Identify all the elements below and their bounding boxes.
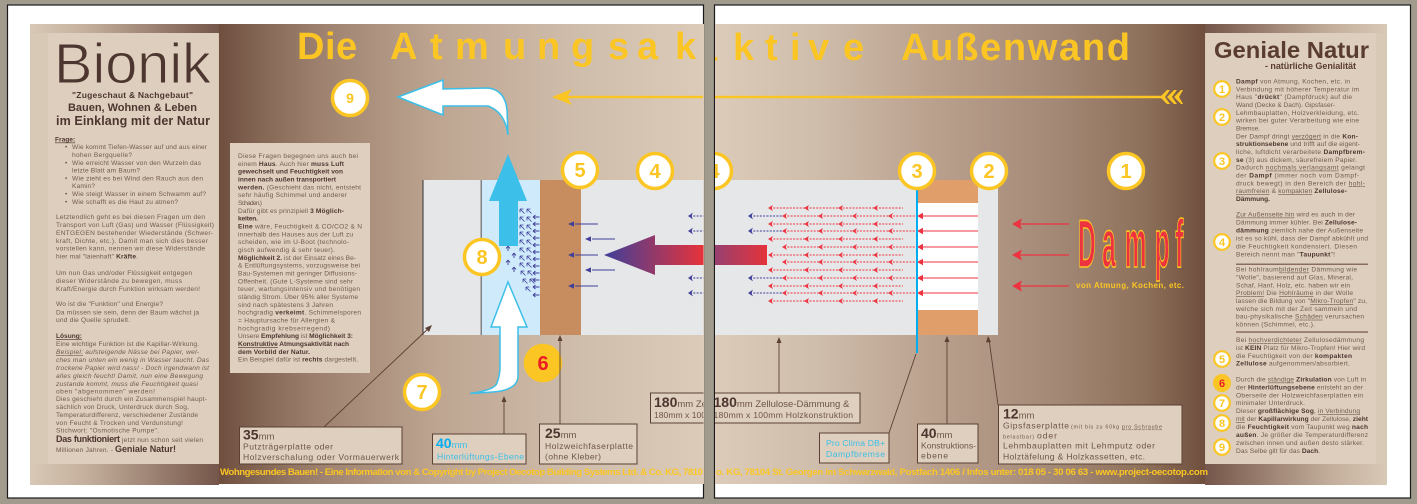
panel: question text box: innerhalb des Hauses aus der Luft zu xyxy=(238,231,353,238)
arrows: incoming vapour xyxy=(1012,218,1069,292)
title: Die Atmungsaktive Außenwand: Außenwand xyxy=(901,27,1130,69)
panel: question text box: Diese Fragen begegnen uns auch bei xyxy=(238,153,359,160)
text: Lösung: alles gleich feucht! Damit, nun eine Bewegung xyxy=(56,373,203,380)
text: Frage: Wie kommt Tiefen-Wasser auf und aus einer xyxy=(72,144,208,151)
number badges in sidebar: 4 xyxy=(1219,237,1226,249)
number badges in sidebar: 1 xyxy=(1219,84,1225,96)
panel: central brown background xyxy=(219,24,1205,484)
text: explanation steps: Bei hohlraumbildender Dämmung wie xyxy=(1236,266,1357,274)
text: Lösung: Temperaturdifferenz, verschiedener Zustände xyxy=(56,412,198,419)
text: Lösung: Geniale Natur! xyxy=(115,444,176,454)
label: Pro Clima DB+: Dampfbremse xyxy=(826,449,885,459)
panel: question text box: werden. (Geschieht das nicht, entsteht xyxy=(237,184,361,191)
text: Lösung: sächlich von Druck, Unterdruck durch Sog, xyxy=(56,404,189,411)
label: Pro Clima DB+: Pro Clima DB+ xyxy=(826,438,885,448)
panel: question text box: Ein Beispiel dafür ist rechts dargestellt. xyxy=(238,357,358,364)
panel: question text box: = Hauptursache für Allergien & xyxy=(238,318,336,324)
label: 35mm: Holzverschalung oder Vormauerwerk xyxy=(243,452,400,462)
heading: Geniale Natur: Geniale Natur xyxy=(1214,37,1369,63)
label: 12mm xyxy=(998,405,1182,464)
text: explanation steps: bau-physikalische Schäden verursachen xyxy=(1236,314,1364,321)
text: Frage: vorstellen kann, nennen wir diese Widerstände xyxy=(56,246,205,252)
label: Dampf: von Atmung, Kochen, etc. xyxy=(1076,281,1184,290)
badge 6: 6 xyxy=(537,353,549,375)
panel: question text box: hochgradig krebserregend) xyxy=(238,325,330,332)
label: 40mm Hinterlüftungs-Ebene: 40mm xyxy=(436,435,467,451)
subheading xyxy=(56,90,210,128)
badge 9 xyxy=(332,80,368,116)
text: Frage: Da müssen sie sein, denn der Baum wächst ja xyxy=(56,310,199,316)
text: explanation steps: Bereich nennt man "Taupunkt"! xyxy=(1236,252,1335,258)
label: 180mm Zellulose xyxy=(680,393,860,423)
text: explanation steps: Lehmbauplatten, Holzverkleidung, etc. xyxy=(1236,110,1359,117)
text: explanation steps: Durch die ständige Zirkulation von Luft in xyxy=(1236,376,1366,384)
label: 12mm: Holztäfelung & Holzkassetten, etc. xyxy=(1003,452,1145,462)
text: explanation steps: Dadurch nochmals verlangsamt gelangt xyxy=(1236,165,1365,172)
title: Die Atmungsaktive Außenwand: Atmungsak xyxy=(390,26,697,68)
text: explanation steps: Problem! Die Hohlräume in der Wolle xyxy=(1236,290,1353,297)
text: Lösung: Millionen Jahren. - xyxy=(56,447,113,454)
badge 3: 3 xyxy=(911,161,923,183)
panel: question text box: ständig Strom. Über 95% aller Systeme xyxy=(238,293,358,301)
text: Lösung: oben "abgenommen" werden! xyxy=(56,388,155,396)
label: 12mm: oder xyxy=(1037,430,1057,440)
label: 25mm: Holzweichfaserplatte xyxy=(545,441,633,451)
text: Frage: letzte Blatt am Baum? xyxy=(72,168,140,174)
arrow: white air outflow xyxy=(398,80,508,135)
panel: question text box: dem Vorbild der Natur. xyxy=(238,349,310,356)
number badges in sidebar: 3 xyxy=(1219,156,1225,168)
footer: copyright line: o. KG, 78104 St. Georgen im Schwarzwald, Postfach 1406 / Infos unter: 018 05 - 30 06 63 - www.project-oecotop.com xyxy=(716,467,1208,478)
badge 4 clipped: 4 xyxy=(708,161,720,183)
leader: Pro Clima xyxy=(889,354,916,433)
text: explanation steps: minimaler Unterdruck. xyxy=(1236,400,1305,407)
text: Frage: Letztendlich geht es bei diesen Fragen um den xyxy=(56,214,205,221)
badge 4 clipped xyxy=(715,152,734,190)
text: explanation steps: Zur Außenseite hin wird es auch in der xyxy=(1236,212,1356,218)
text: explanation steps: ist es so kühl, dass der Dampf abkühlt und xyxy=(1236,236,1368,242)
arrows: dashed purple xyxy=(688,212,704,296)
badge 5: 5 xyxy=(574,160,586,182)
panel: Geniale Natur sidebar xyxy=(1205,24,1387,485)
text: Frage: Transport von Luft (Gas) und Wasser (Flüssigkeit) xyxy=(56,222,214,229)
wall diagram: left page xyxy=(240,80,734,464)
label: 180mm clipped part: 180mm x 100mm xyxy=(654,410,720,420)
badge 1 xyxy=(1108,154,1144,188)
text: explanation steps: dämmung ziemlich nahe der Außenseite xyxy=(1236,228,1363,234)
text: explanation steps: Oberseite der Holzweichfaserplatten ein xyxy=(1236,392,1363,399)
text: explanation steps: Dämmung immer kühler. Bei Zellulose- xyxy=(1236,220,1357,226)
badge 2: 2 xyxy=(983,161,995,183)
number badges in sidebar: 9 xyxy=(1219,442,1225,454)
number badges in sidebar: 6 xyxy=(1219,378,1225,390)
text: Lösung: von Feucht & Trocken und Verdunstung! xyxy=(56,420,183,427)
label: 35mm: Putzträgerplatte oder xyxy=(243,442,333,452)
text: Frage: • xyxy=(65,199,68,206)
panel: question text box: sind nach spätestens 3 Jahren xyxy=(238,302,333,309)
label: 12mm: 12mm xyxy=(1003,406,1034,422)
panel: question text box: gewechselt und Feuchtigkeit von xyxy=(238,169,343,176)
text: Lösung: zustande kommt, muss die Feuchtigkeit quasi xyxy=(55,381,199,388)
badge 6 xyxy=(524,344,562,382)
text: Lösung: Eine wichtige Funktion ist die Kapillar-Wirkung. xyxy=(56,341,199,348)
text: Frage: hohen Bergquelle? xyxy=(72,152,132,159)
arrows: solid red through construction layer xyxy=(917,213,978,296)
text: explanation steps: mit der Kapillarwirkung der Zellulose, zieht xyxy=(1236,416,1369,423)
text: explanation steps: zwischen innen und außen desto stärker. xyxy=(1236,440,1364,447)
label: 40mm Konstruktionsebene: 40mm xyxy=(921,425,952,441)
text: Frage: • xyxy=(65,176,68,182)
label: Dampf: Dampf xyxy=(1078,206,1184,282)
leader: 40mm ventilation xyxy=(502,396,506,434)
text: Lösung: Lösung: xyxy=(56,333,82,340)
panel: question text box: & Entlüftungsystems, vorzugsweise bei xyxy=(238,263,361,270)
text: explanation steps: lassen die Bildung von "Mikro-Tropfen" zu, xyxy=(1236,298,1367,305)
panel: question text box: Schaden.) xyxy=(238,200,262,207)
badge 9: 9 xyxy=(346,90,354,106)
text: Frage: • xyxy=(65,144,68,151)
text: Lösung: trockene Papier wird nass! - Doch irgendwann ist xyxy=(56,365,210,372)
text: Frage: Wie zieht es bei Wind den Rauch aus den xyxy=(72,176,203,182)
text: explanation steps: Verbindung mit höherer Temperatur im xyxy=(1236,86,1360,93)
text: Frage: Um nun Gas und/oder Flüssigkeit entgegen xyxy=(56,270,192,277)
label: 180mm Zellulose: 180mm Zellulose-Dämmung & xyxy=(714,394,850,410)
label: 180mm clipped part xyxy=(650,392,704,424)
text: Lösung: Dies geschieht durch ein Zusammenspiel haupt- xyxy=(56,396,207,403)
label: 25mm: (ohne Kleber) xyxy=(545,452,601,462)
text: explanation steps: die Feuchtigkeit von der kompakten xyxy=(1236,353,1352,360)
panel: question text box: Konstruktive Atmungsaktivität nach xyxy=(238,341,349,348)
panel: question text box: Eine wäre, Feuchtigkeit & CO/CO2 & N xyxy=(238,224,362,230)
footer: copyright line: Wohngesundes Bauen! - Eine Information von & Copyright by Project Oecotop Building Systems Ltd. & Co. KG, 7810 xyxy=(220,467,703,478)
text: explanation steps: außen. Je größer die Temperaturdifferenz xyxy=(1236,432,1368,439)
number badges in sidebar: 7 xyxy=(1219,398,1225,410)
badge 7 xyxy=(404,374,440,410)
panel: question text box: Offenheit. (Gute L-Systeme sind sehr xyxy=(238,278,354,285)
text: Frage: kraft, Dichte, etc.). Damit man sich dies besser xyxy=(56,238,209,245)
panel: question text box xyxy=(230,143,370,373)
text: explanation steps: "Wolle", basierend auf Glas, Mineral, xyxy=(1236,274,1353,281)
text: explanation steps: Bei hochverdichteter Zellulosedämmung xyxy=(1236,337,1364,344)
text: explanation steps: Dieser großflächige Sog, in Verbindung xyxy=(1236,408,1360,415)
text: Lösung: Das funktioniert xyxy=(56,434,120,444)
label: 40mm Konstruktionsebene: Konstruktions- xyxy=(921,440,976,450)
text: explanation steps: die Feuchtigkeit vom Taupunkt weg nach xyxy=(1236,424,1368,431)
arrow: blue air upward xyxy=(489,154,527,246)
label: 40mm Hinterlüftungs-Ebene xyxy=(432,434,526,464)
badge 8: 8 xyxy=(476,247,488,269)
arrow: big gradient vapour arrow xyxy=(604,235,704,275)
panel: Bionik sidebar xyxy=(30,24,219,485)
panel: question text box: Unsere Empfehlung ist Möglichkeit 3: xyxy=(238,333,353,340)
text: Frage: • xyxy=(65,160,68,167)
label: 12mm: Lehmbauplatten mit Lehmputz oder xyxy=(1003,440,1155,450)
text: Frage: dieser Widerstände zu bewegen, muss xyxy=(56,278,183,285)
arrows: blue moisture through fibre board xyxy=(568,221,615,289)
label: 180mm Zellulose: 180mm x 100mm Holzkonstruktion xyxy=(714,410,853,420)
text: explanation steps: druck bewegt) in den Bereich der hohl- xyxy=(1236,180,1365,187)
label: 35mm: 35mm xyxy=(243,426,274,442)
small arrows: moisture in ventilation layer xyxy=(506,209,540,297)
panel: question text box: hochgradig verkeimt. Schimmelsporen xyxy=(238,310,361,317)
leader: 35mm xyxy=(324,325,432,427)
vapour barrier line xyxy=(916,180,918,353)
title: Die Atmungsaktive Außenwand: a xyxy=(696,27,718,69)
subheading: "Zugeschaut & Nachgebaut" xyxy=(72,90,193,100)
label: 40mm Konstruktionsebene xyxy=(918,424,978,463)
heading: Bionik: Bionik xyxy=(54,32,212,96)
arrow: white air inflow xyxy=(470,282,527,394)
text: explanation steps: struktionsebene und trifft auf die eigent- xyxy=(1236,141,1360,148)
badge 5 xyxy=(562,152,598,188)
label: 25mm xyxy=(540,424,637,464)
text: Frage: und die Quelle sprudelt. xyxy=(56,317,130,324)
footer: copyright line xyxy=(220,467,1208,478)
text: explanation steps: se (3) aus dickem, säurefreiem Papier. xyxy=(1236,157,1357,164)
text: Frage: Kraft/Energie durch Funktion wirksam werden! xyxy=(56,286,200,293)
text: explanation steps: Zellulose aufgenommen/absorbiert. xyxy=(1236,360,1350,368)
arrows: dashed vapour rows xyxy=(748,205,917,304)
text: explanation steps: ist KEIN Platz für Mikro-Tropfen! Hier wird xyxy=(1236,345,1365,352)
text: Lösung: Beispiel: aufsteigende Nässe bei Papier, wel- xyxy=(56,349,200,356)
text: Frage: Wie schafft es die Haut zu atmen? xyxy=(72,199,178,206)
panel: question text box: innen nach außen transportiert xyxy=(238,176,337,184)
panel: question text box: Dafür gibt es prinzipiell 3 Möglich- xyxy=(238,208,344,215)
text: explanation steps: Wand (Decke & Dach). Gipsfaser- xyxy=(1236,102,1335,109)
text: Frage: Wie steigt Wasser in einem Schwamm auf? xyxy=(72,191,206,198)
panel: question text box: keiten. xyxy=(238,216,258,223)
label: 25mm: 25mm xyxy=(545,425,576,441)
panel: question text box: scheiden, wie im U-Boot (technolo- xyxy=(238,239,349,246)
text: explanation steps: Bremse. xyxy=(1236,126,1260,132)
text: explanation steps: die Feuchtigkeit kondensiert. Diesen xyxy=(1236,244,1357,250)
text: explanation steps: Dampf von Atmung, Kochen, etc. in xyxy=(1236,78,1350,86)
wall diagram: right page xyxy=(680,154,1184,464)
text: Lösung: ches man unten ein wenig in Wasser taucht. Das xyxy=(56,357,210,364)
text: Frage: Frage: xyxy=(55,136,75,144)
badge 2 xyxy=(972,154,1006,188)
text: Lösung: jetzt nun schon seit vielen xyxy=(121,437,203,444)
text: explanation steps: Der Dampf dringt verzögert in die Kon- xyxy=(1236,133,1358,140)
text: explanation steps: der Dampf (immer noch vom Dampf- xyxy=(1236,172,1359,180)
text: Frage: Wie erreicht Wasser von den Wurzeln das xyxy=(72,160,202,167)
number badges in sidebar xyxy=(1213,81,1231,455)
label: 12mm: (mit bis zu 60kg pro Schraube xyxy=(1071,424,1162,430)
number badges in sidebar: 5 xyxy=(1219,354,1225,366)
panel: question text box: teuer, wartungsintensiv und benötigen xyxy=(238,286,360,293)
text: Frage: ENTGEGEN bestehender Wiederstände (Schwer- xyxy=(56,230,213,237)
badge 4 xyxy=(638,154,672,188)
number badges in sidebar: 2 xyxy=(1219,112,1225,124)
text: explanation steps: Haus "drückt" (Dampfdruck) auf die xyxy=(1236,94,1352,101)
badge 8 xyxy=(464,240,500,274)
text: explanation steps: Schaf, Hanf, Holz, etc. haben wir ein xyxy=(1236,282,1350,289)
text: Frage: Wo ist die "Funktion" und Energie? xyxy=(56,301,163,308)
text: Frage xyxy=(55,136,214,324)
panel: question text box: gisch aufwendig & sehr teuer). xyxy=(238,247,335,254)
label: 40mm Konstruktionsebene: ebene xyxy=(921,450,948,460)
leader: 25mm xyxy=(558,335,562,424)
label: 12mm: belastbar) xyxy=(1003,434,1034,440)
text: Frage: • xyxy=(65,191,68,198)
subheading: - natürliche Genialität xyxy=(1265,61,1356,71)
label: 40mm Hinterlüftungs-Ebene: Hinterlüftungs-Ebene xyxy=(437,452,524,462)
wall layers xyxy=(422,180,704,335)
title: Die Atmungsaktive Außenwand: Die xyxy=(297,26,357,68)
text: explanation steps: liche, luftdicht verarbeitete Dampfbrem- xyxy=(1236,149,1365,156)
panel: question text box: einem Haus. Auch hier muss Luft xyxy=(238,161,345,168)
badge 4: 4 xyxy=(649,161,661,183)
text: explanation steps: Dämmung. xyxy=(1236,196,1270,203)
arrow: big arrow shaft xyxy=(715,245,767,265)
text: Frage: Kamin? xyxy=(72,183,95,190)
text: explanation steps: welche sich mit der Zeit sammeln und xyxy=(1235,306,1357,313)
label: 180mm clipped part: 180mm Zellulose xyxy=(654,394,734,410)
subheading: im Einklang mit der Natur xyxy=(56,114,210,128)
title: Die Atmungsaktive Außenwand: ktive xyxy=(733,27,864,69)
wall layers xyxy=(715,180,998,335)
badge 1: 1 xyxy=(1120,161,1132,183)
arrow: yellow roof arrow xyxy=(552,89,1183,105)
badge 7: 7 xyxy=(416,382,428,404)
label: 12mm: Gipsfaserplatte xyxy=(1003,420,1069,430)
panel: question text box: Bau-Systemen mit geringer Diffusions- xyxy=(238,270,357,278)
text: Lösung xyxy=(55,333,210,454)
leader: 180mm xyxy=(776,337,782,393)
text: Lösung: Stichwort: "Osmotische Pumpe". xyxy=(56,428,159,434)
title: Die Atmungsaktive Außenwand xyxy=(300,32,1128,67)
text: explanation steps xyxy=(1235,78,1369,455)
leader: 12mm xyxy=(986,336,998,405)
text: explanation steps: wirken bei guter Verarbeitung wie eine xyxy=(1235,118,1359,125)
text: explanation steps: Das Selbe gilt für das Dach. xyxy=(1236,448,1320,455)
text: Frage: hier mal "laienhaft" Kräfte. xyxy=(56,254,138,260)
text: explanation steps: der Hinterlüftungsebene entsteht an der xyxy=(1236,384,1364,392)
number badges in sidebar: 8 xyxy=(1219,418,1225,430)
text: explanation steps: können (Schimmel, etc.). xyxy=(1236,322,1315,328)
panel: question text box: Möglichkeit 2. ist der Einsatz eines Be- xyxy=(238,255,356,262)
label: Pro Clima DB+ xyxy=(820,433,889,463)
panel: question text box: sehr häufig Schimmel und anderer xyxy=(238,192,348,199)
subheading: Bauen, Wohnen & Leben xyxy=(68,102,197,114)
leader: 40mm construction xyxy=(944,336,950,424)
text: explanation steps: raumfreien & kompakten Zellulose- xyxy=(1236,188,1347,195)
label: 35mm xyxy=(240,426,402,464)
badge 3 xyxy=(900,154,934,188)
